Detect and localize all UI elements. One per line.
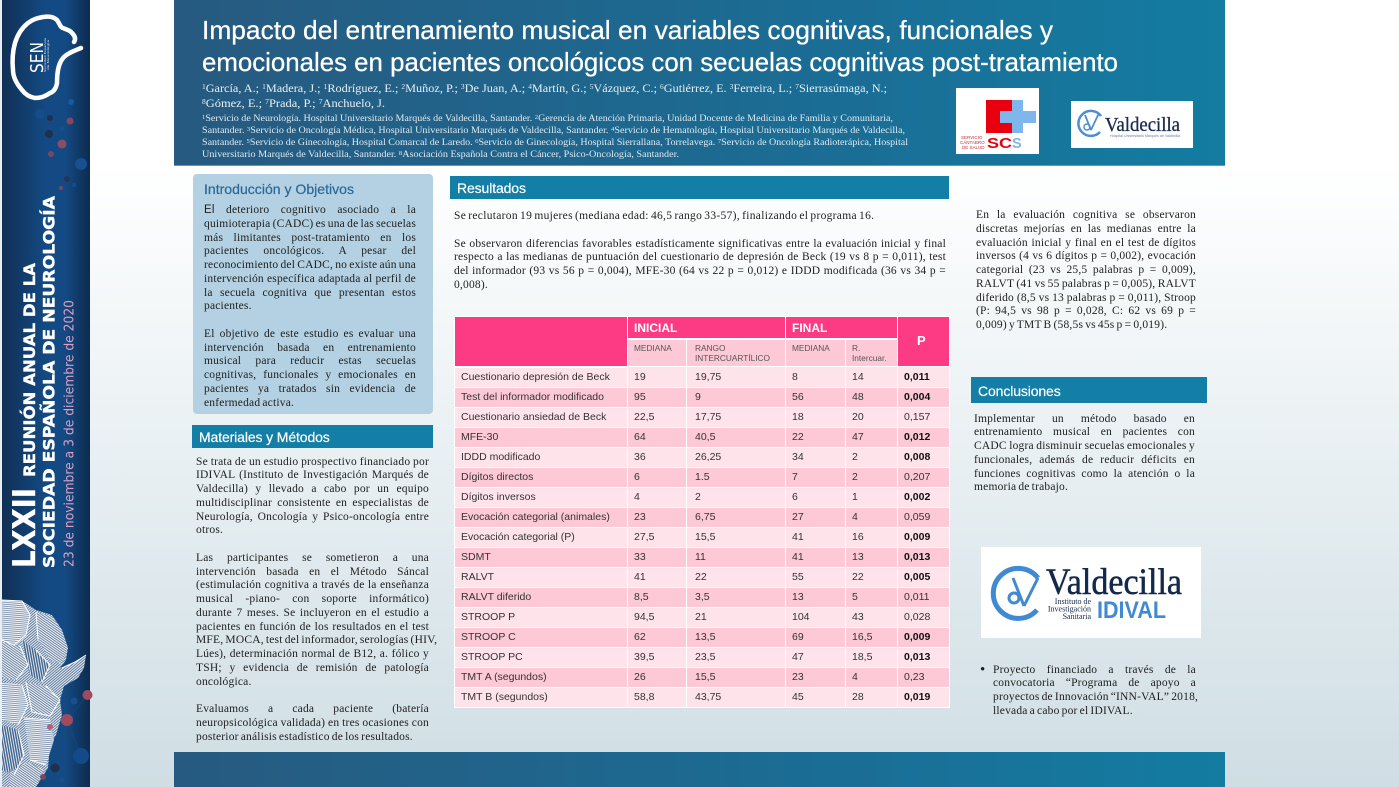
heading: conclusiones: Conclusiones: [978, 383, 1061, 399]
table: results: 8: [792, 371, 798, 383]
table: results: 13: [792, 591, 804, 603]
funding note: convocatoria “Programa de apoyo a: [993, 677, 1196, 689]
text: conclusiones: [974, 412, 1195, 493]
table: results: 15,5: [695, 671, 715, 683]
table: results: RANGO: [695, 343, 725, 353]
authors: 7: [265, 98, 270, 106]
table: results: 39,5: [634, 651, 654, 663]
table: results: 6: [792, 491, 798, 503]
table: results: 45: [792, 691, 804, 703]
table: results: 0,059: [904, 511, 930, 523]
text: materiales y métodos: multidisciplinar consistente en especialistas de: [196, 497, 429, 509]
authors: 3: [730, 83, 734, 91]
table: results: 7: [792, 471, 798, 483]
table: results: RALVT: [461, 571, 494, 583]
table: results: 19,75: [695, 371, 721, 383]
text: cognitive evaluation: En la evaluación cognitiva se observaron: [976, 209, 1196, 221]
congress title: SOCIEDAD ESPAÑOLA DE NEUROLOGÍA: [40, 195, 58, 568]
text: materiales y métodos: TSH; y evidencia de remisión de patología: [196, 662, 429, 674]
table: results: 2: [852, 471, 858, 483]
authors: 1: [262, 83, 266, 91]
table: results: 23: [634, 511, 646, 523]
logo: Valdecilla IDIVAL: Investigación: [1048, 604, 1091, 614]
table: results: 5: [852, 591, 858, 603]
authors: Vázquez, C.;: [593, 83, 660, 95]
text: materiales y métodos: Valdecilla) y llevado a cabo por un equipo: [196, 483, 429, 495]
authors: 7: [795, 83, 800, 91]
table: results: [454, 316, 950, 708]
table: results: 20: [852, 411, 864, 423]
table: results: 21: [695, 611, 707, 623]
table: results: RALVT diferido: [461, 591, 531, 603]
logo: Valdecilla IDIVAL: [981, 547, 1201, 638]
authors: 2: [401, 83, 406, 91]
text: materiales y métodos: Lúes), determinación normal de B12, a. fólico y: [196, 648, 429, 660]
affiliations: Universitario Marqués de Valdecilla, Santander.: [202, 149, 374, 159]
authors: Sierrasúmaga, N.;: [799, 83, 887, 95]
table: results: 14: [852, 371, 864, 383]
table: results: 94,5: [634, 611, 654, 623]
logo: SCS: [956, 88, 1039, 154]
affiliations: 1: [202, 115, 205, 121]
logo: Valdecilla IDIVAL: IDIVAL: [1097, 597, 1166, 624]
affiliations: Servicio de Hematología, Hospital Universitario Marqués de Valdecilla,: [614, 125, 905, 135]
table: results: Intercuar.: [852, 353, 887, 363]
table: results: 47: [792, 651, 804, 663]
text: cognitive evaluation: inversos (4 vs 6 dígitos p = 0,002), evocación: [976, 250, 1196, 262]
text: introducción: intervención específica adaptada al perfil de: [204, 273, 416, 285]
table: results: 28: [852, 691, 864, 703]
table: results: IDDD modificado: [461, 451, 540, 463]
table: results: 104: [792, 611, 810, 623]
table: results: 41: [792, 531, 804, 543]
table: results: 0,009: [904, 631, 930, 643]
table: results: 0,028: [904, 611, 930, 623]
table: results: Evocación categorial (P): [461, 531, 575, 543]
SEN logo: SEN: [27, 42, 48, 73]
authors: 8: [202, 98, 206, 106]
authors: 5: [590, 83, 594, 91]
table: results: 18: [792, 411, 804, 423]
table: results: 26,25: [695, 451, 721, 463]
table: results: 40,5: [695, 431, 715, 443]
text: introducción: la secuela cognitiva que presentan estos: [204, 286, 416, 298]
text: resultados: respecto a las medianas de puntuación del cuestionario de depresión de Beck (19 vs 8 p = 0,011), test: [454, 251, 946, 263]
logo: SCS: CÁNTABRO: [960, 139, 985, 145]
table: results: 43: [852, 611, 864, 623]
table: results: Cuestionario depresión de Beck: [461, 371, 610, 383]
logo: Valdecilla IDIVAL: Instituto de: [1055, 597, 1091, 606]
logo: SCS: DE SALUD: [962, 145, 985, 150]
text: introducción: musical para reducir estas secuelas: [204, 355, 416, 367]
affiliations: 6: [475, 139, 478, 145]
text: materiales y métodos: posterior análisis estadístico de los resultados.: [196, 730, 413, 742]
authors: Anchuelo, J.: [322, 98, 385, 110]
table: results: 4: [634, 491, 640, 503]
authors: Gutiérrez, E.: [664, 83, 730, 95]
table: results: 6: [634, 471, 640, 483]
funding note: •: [980, 662, 985, 678]
authors: Rodríguez, E.;: [327, 83, 401, 95]
table: results: Evocación categorial (animales): [461, 511, 610, 523]
table: results: 27,5: [634, 531, 654, 543]
table: results: 41: [634, 571, 646, 583]
table: results: Test del informador modificado: [461, 391, 604, 403]
table: results: 4: [852, 511, 858, 523]
logo: Valdecilla hospital: Hospital Universitario Marqués de Valdecilla: [1110, 134, 1180, 138]
text: cognitive evaluation: [976, 209, 1196, 331]
table: results: MEDIANA: [634, 343, 672, 353]
title: Impacto del entrenamiento musical en variables cognitivas, funcionales y: [202, 15, 1053, 45]
heading: materiales y métodos: [192, 425, 433, 448]
affiliations: Santander.: [202, 125, 240, 135]
text: materiales y métodos: Se trata de un estudio prospectivo financiado por: [196, 456, 429, 468]
table: results: 0,019: [904, 691, 930, 703]
text: cognitive evaluation: RALVT (41 vs 55 palabras p = 0,005), RALVT: [976, 278, 1196, 290]
text: introducción: reconocimiento del CADC, no existe aún una: [204, 259, 416, 271]
table: results: TMT B (segundos): [461, 691, 548, 703]
authors: De Juan, A.;: [465, 83, 528, 95]
table: results: 11: [695, 551, 706, 563]
table: results: INTERCUARTÍLICO: [695, 353, 770, 363]
table: results: Dígitos directos: [461, 471, 533, 483]
table: results: STROOP PC: [461, 651, 523, 663]
table: results: 0,002: [904, 491, 930, 503]
logo: SCS: S: [1012, 136, 1022, 152]
table: results: SDMT: [461, 551, 491, 563]
table: results: 3,5: [695, 591, 710, 603]
congress title: REUNIÓN ANUAL DE LA: [20, 262, 39, 477]
SEN logo: [13, 17, 81, 98]
title: emocionales en pacientes oncológicos con secuelas cognitivas post-tratamiento: [202, 47, 1118, 77]
table: results: 6,75: [695, 511, 715, 523]
affiliations: [202, 113, 909, 159]
table: results: 9: [695, 391, 701, 403]
table: results: 19: [634, 371, 646, 383]
top banner: [174, 0, 1225, 166]
table: results: 27: [792, 511, 804, 523]
table: results: FINAL: [792, 320, 827, 334]
funding note: llevada a cabo por el IDIVAL.: [993, 705, 1133, 717]
congress title: LXXII: [7, 488, 43, 568]
heading: materiales y métodos: Materiales y Métodos: [199, 429, 330, 445]
text: materiales y métodos: pacientes en función de los resultados en el test: [196, 620, 429, 632]
table: results: STROOP P: [461, 611, 515, 623]
table: results: 55: [792, 571, 804, 583]
text: materiales y métodos: [196, 456, 437, 742]
authors: Muñoz, P.;: [405, 83, 461, 95]
text: materiales y métodos: Evaluamos a cada paciente (batería: [196, 703, 429, 715]
text: introducción: pacientes oncológicos. A pesar del: [204, 245, 416, 257]
table: results: 0,011: [904, 591, 930, 603]
text: conclusiones: CADC logra disminuir secuelas emocionales y: [974, 440, 1195, 452]
authors: 1: [324, 83, 328, 91]
text: materiales y métodos: MFE, MOCA, test del informador, serologías (HIV,: [196, 634, 437, 646]
table: results: 1: [852, 491, 858, 503]
table: results: 41: [792, 551, 804, 563]
heading: resultados: [450, 176, 949, 199]
text: conclusiones: funciones cognitivas como la atención o la: [974, 468, 1195, 480]
table: results: 0,207: [904, 471, 930, 483]
table: results: 58,8: [634, 691, 654, 703]
table: results: 47: [852, 431, 864, 443]
congress title: [7, 195, 58, 568]
table: results: 22: [792, 431, 804, 443]
SEN logo: Sociedad Española: [43, 37, 47, 72]
table: results: 0,011: [904, 371, 930, 383]
table: results: 15,5: [695, 531, 715, 543]
authors: 3: [461, 83, 465, 91]
affiliations: 7: [718, 139, 721, 145]
text: resultados: Se reclutaron 19 mujeres (mediana edad: 46,5 rango 33-57), finalizando el programa 16.: [454, 210, 874, 222]
brain illustration: [2, 600, 86, 787]
table: results: 26: [634, 671, 646, 683]
table: results: 0,013: [904, 651, 930, 663]
molecule decoration top: [35, 99, 87, 190]
heading: introducción: Introducción y Objetivos: [204, 181, 354, 197]
text: cognitive evaluation: evaluación inicial y final en el test de dígitos: [976, 236, 1196, 248]
authors: 4: [528, 83, 532, 91]
authors: 1: [202, 83, 206, 91]
text: resultados: Se observaron diferencias favorables estadísticamente significativas entre la evaluación inicial y final: [454, 238, 946, 250]
left sidebar: [0, 0, 92, 787]
table: results: TMT A (segundos): [461, 671, 547, 683]
authors: Ferreira, L.;: [733, 83, 795, 95]
table: results: 0,004: [904, 391, 930, 403]
table: results: 0,157: [904, 411, 930, 423]
authors: Madera, J.;: [266, 83, 324, 95]
table: results: 95: [634, 391, 646, 403]
affiliations: Servicio de Oncología Médica, Hospital Universitario Marqués de Valdecilla, Santander.: [250, 125, 611, 135]
table: results: 0,005: [904, 571, 930, 583]
table: results: 34: [792, 451, 804, 463]
affiliations: Santander.: [202, 137, 240, 147]
text: cognitive evaluation: categorial (23 vs 25,5 palabras p = 0,009),: [976, 264, 1196, 276]
table: results: 22,5: [634, 411, 654, 423]
text: introducción: enfermedad activa.: [204, 396, 294, 408]
text: cognitive evaluation: diferido (8,5 vs 13 palabras p = 0,011), Stroop: [976, 292, 1196, 304]
table: results: 22: [852, 571, 864, 583]
table: results: 13,5: [695, 631, 715, 643]
affiliations: Servicio de Neurología. Hospital Universitario Marqués de Valdecilla, Santander.: [205, 113, 535, 123]
authors: García, A.;: [206, 83, 262, 95]
table: results: 0,012: [904, 431, 930, 443]
heading: conclusiones: [971, 377, 1207, 403]
text: cognitive evaluation: discretas mejorías en las medianas entre la: [976, 223, 1196, 235]
table: results: MFE-30: [461, 431, 498, 443]
text: materiales y métodos: neuropsicológica validada) en tres ocasiones con: [196, 717, 429, 729]
logo: Valdecilla IDIVAL: Valdecilla: [1046, 562, 1182, 603]
funding note: proyectos de Innovación “INN-VAL” 2018,: [993, 691, 1198, 703]
table: results: MEDIANA: [792, 343, 830, 353]
panel: introducción y objetivos: [193, 174, 433, 414]
affiliations: 4: [611, 127, 614, 133]
text: resultados: 0,008).: [454, 279, 488, 291]
text: materiales y métodos: (estimulación cognitiva a través de la enseñanza: [196, 579, 429, 591]
table: results: 18,5: [852, 651, 872, 663]
text: resultados: [454, 210, 946, 291]
table: results: 0,013: [904, 551, 930, 563]
table: results: 23,5: [695, 651, 715, 663]
affiliations: Servicio de Oncología Radioterápica, Hospital: [721, 137, 909, 147]
table: results: 62: [634, 631, 646, 643]
table: results: 48: [852, 391, 864, 403]
text: resultados: del informador (93 vs 56 p = 0,004), MFE-30 (64 vs 22 p = 0,012) e IDDD modificada (36 vs 34 p =: [454, 265, 946, 277]
table: results: 17,75: [695, 411, 721, 423]
table: results: Dígitos inversos: [461, 491, 536, 503]
table: results: 0,009: [904, 531, 930, 543]
text: introducción: El deterioro cognitivo asociado a la: [204, 204, 416, 216]
affiliations: Asociación Española Contra el Cáncer, Psico-Oncología, Santander.: [402, 149, 679, 159]
table: results: 2: [852, 451, 858, 463]
affiliations: Servicio de Ginecología, Hospital Sierrallana, Torrelavega.: [478, 137, 718, 147]
text: cognitive evaluation: (P: 94,5 vs 98 p = 0,028, C: 62 vs 69 p =: [976, 305, 1196, 317]
logo: Valdecilla hospital: [1071, 101, 1193, 148]
congress dates: 23 de noviembre a 3 de diciembre de 2020: [62, 300, 78, 567]
table: results: 22: [695, 571, 707, 583]
text: introducción: [204, 204, 416, 408]
text: introducción: quimioterapia (CADC) es una de las secuelas: [204, 218, 416, 230]
molecule decoration bottom: [40, 690, 92, 782]
table: results: INICIAL: [634, 320, 677, 334]
text: materiales y métodos: Las participantes se sometieron a una: [196, 552, 429, 564]
affiliations: 3: [247, 127, 250, 133]
text: materiales y métodos: IDIVAL (Instituto de Investigación Marqués de: [196, 469, 429, 481]
text: introducción: más limitantes post-tratamiento en los: [204, 232, 416, 244]
table: results: 23: [792, 671, 804, 683]
affiliations: Servicio de Ginecología, Hospital Comarcal de Laredo.: [250, 137, 475, 147]
affiliations: 2: [535, 115, 538, 121]
text: introducción: El objetivo de este estudio es evaluar una: [204, 328, 416, 340]
funding note: Proyecto financiado a través de la: [993, 664, 1196, 676]
table: results: 43,75: [695, 691, 721, 703]
bottom banner: [174, 752, 1225, 787]
text: conclusiones: memoria de trabajo.: [974, 481, 1068, 493]
text: materiales y métodos: intervención basada en el Método Sáncal: [196, 566, 429, 578]
table: results: 69: [792, 631, 804, 643]
table: results: STROOP C: [461, 631, 516, 643]
text: introducción: cognitivas, funcionales y emocionales en: [204, 369, 416, 381]
text: introducción: pacientes ya tratados sin evidencia de: [204, 383, 416, 395]
logo: SCS: SC: [987, 136, 1013, 152]
text: cognitive evaluation: 0,009) y TMT B (58,5s vs 45s p = 0,019).: [976, 319, 1167, 331]
text: introducción: pacientes.: [204, 300, 252, 312]
table: results: 4: [852, 671, 858, 683]
authors: 7: [319, 98, 323, 106]
text: materiales y métodos: Neurología, Oncología y Psico-oncología entre: [196, 510, 429, 522]
text: conclusiones: entrenamiento musical en pacientes con: [974, 426, 1195, 438]
table: results: 64: [634, 431, 646, 443]
title: [202, 15, 1118, 159]
funding note: [980, 662, 1198, 717]
logo: SCS: SERVICIO: [961, 135, 983, 140]
authors: Martín, G.;: [532, 83, 590, 95]
table: results: 0,008: [904, 451, 930, 463]
text: materiales y métodos: durante 7 meses. Se incluyeron en el estudio a: [196, 607, 429, 619]
SEN logo: de Neurología: [46, 39, 50, 70]
authors: Gómez, E.;: [206, 98, 265, 110]
table: results: 13: [852, 551, 864, 563]
text: materiales y métodos: musical -piano- con soporte informático): [196, 593, 429, 605]
table: results: Cuestionario ansiedad de Beck: [461, 411, 606, 423]
authors: 6: [660, 83, 664, 91]
heading: resultados: Resultados: [457, 180, 526, 196]
affiliations: 5: [247, 139, 250, 145]
table: results: 2: [695, 491, 701, 503]
authors: Prada, P.;: [269, 98, 319, 110]
logo: Valdecilla hospital: Valdecilla: [1105, 114, 1180, 136]
logo: Valdecilla IDIVAL: Sanitaria: [1063, 612, 1091, 621]
table: results: P: [917, 332, 926, 348]
table: results: 56: [792, 391, 804, 403]
authors: [202, 83, 887, 110]
table: results: 16: [852, 531, 864, 543]
table: results: 16,5: [852, 631, 872, 643]
text: conclusiones: funcionales, además de reducir déficits en: [974, 454, 1195, 466]
affiliations: 8: [399, 151, 402, 157]
text: conclusiones: Implementar un método basado en: [974, 412, 1195, 424]
table: results: R.: [852, 343, 860, 353]
table: results: 0,23: [904, 671, 924, 683]
text: materiales y métodos: otros.: [196, 524, 223, 536]
affiliations: Gerencia de Atención Primaria, Unidad Docente de Medicina de Familia y Comunitaria,: [538, 113, 893, 123]
table: results: 36: [634, 451, 646, 463]
text: materiales y métodos: oncológica.: [196, 676, 252, 688]
table: results: 33: [634, 551, 646, 563]
table: results: 8,5: [634, 591, 649, 603]
table: results: 1.5: [695, 471, 710, 483]
text: introducción: intervención basada en entrenamiento: [204, 342, 416, 354]
